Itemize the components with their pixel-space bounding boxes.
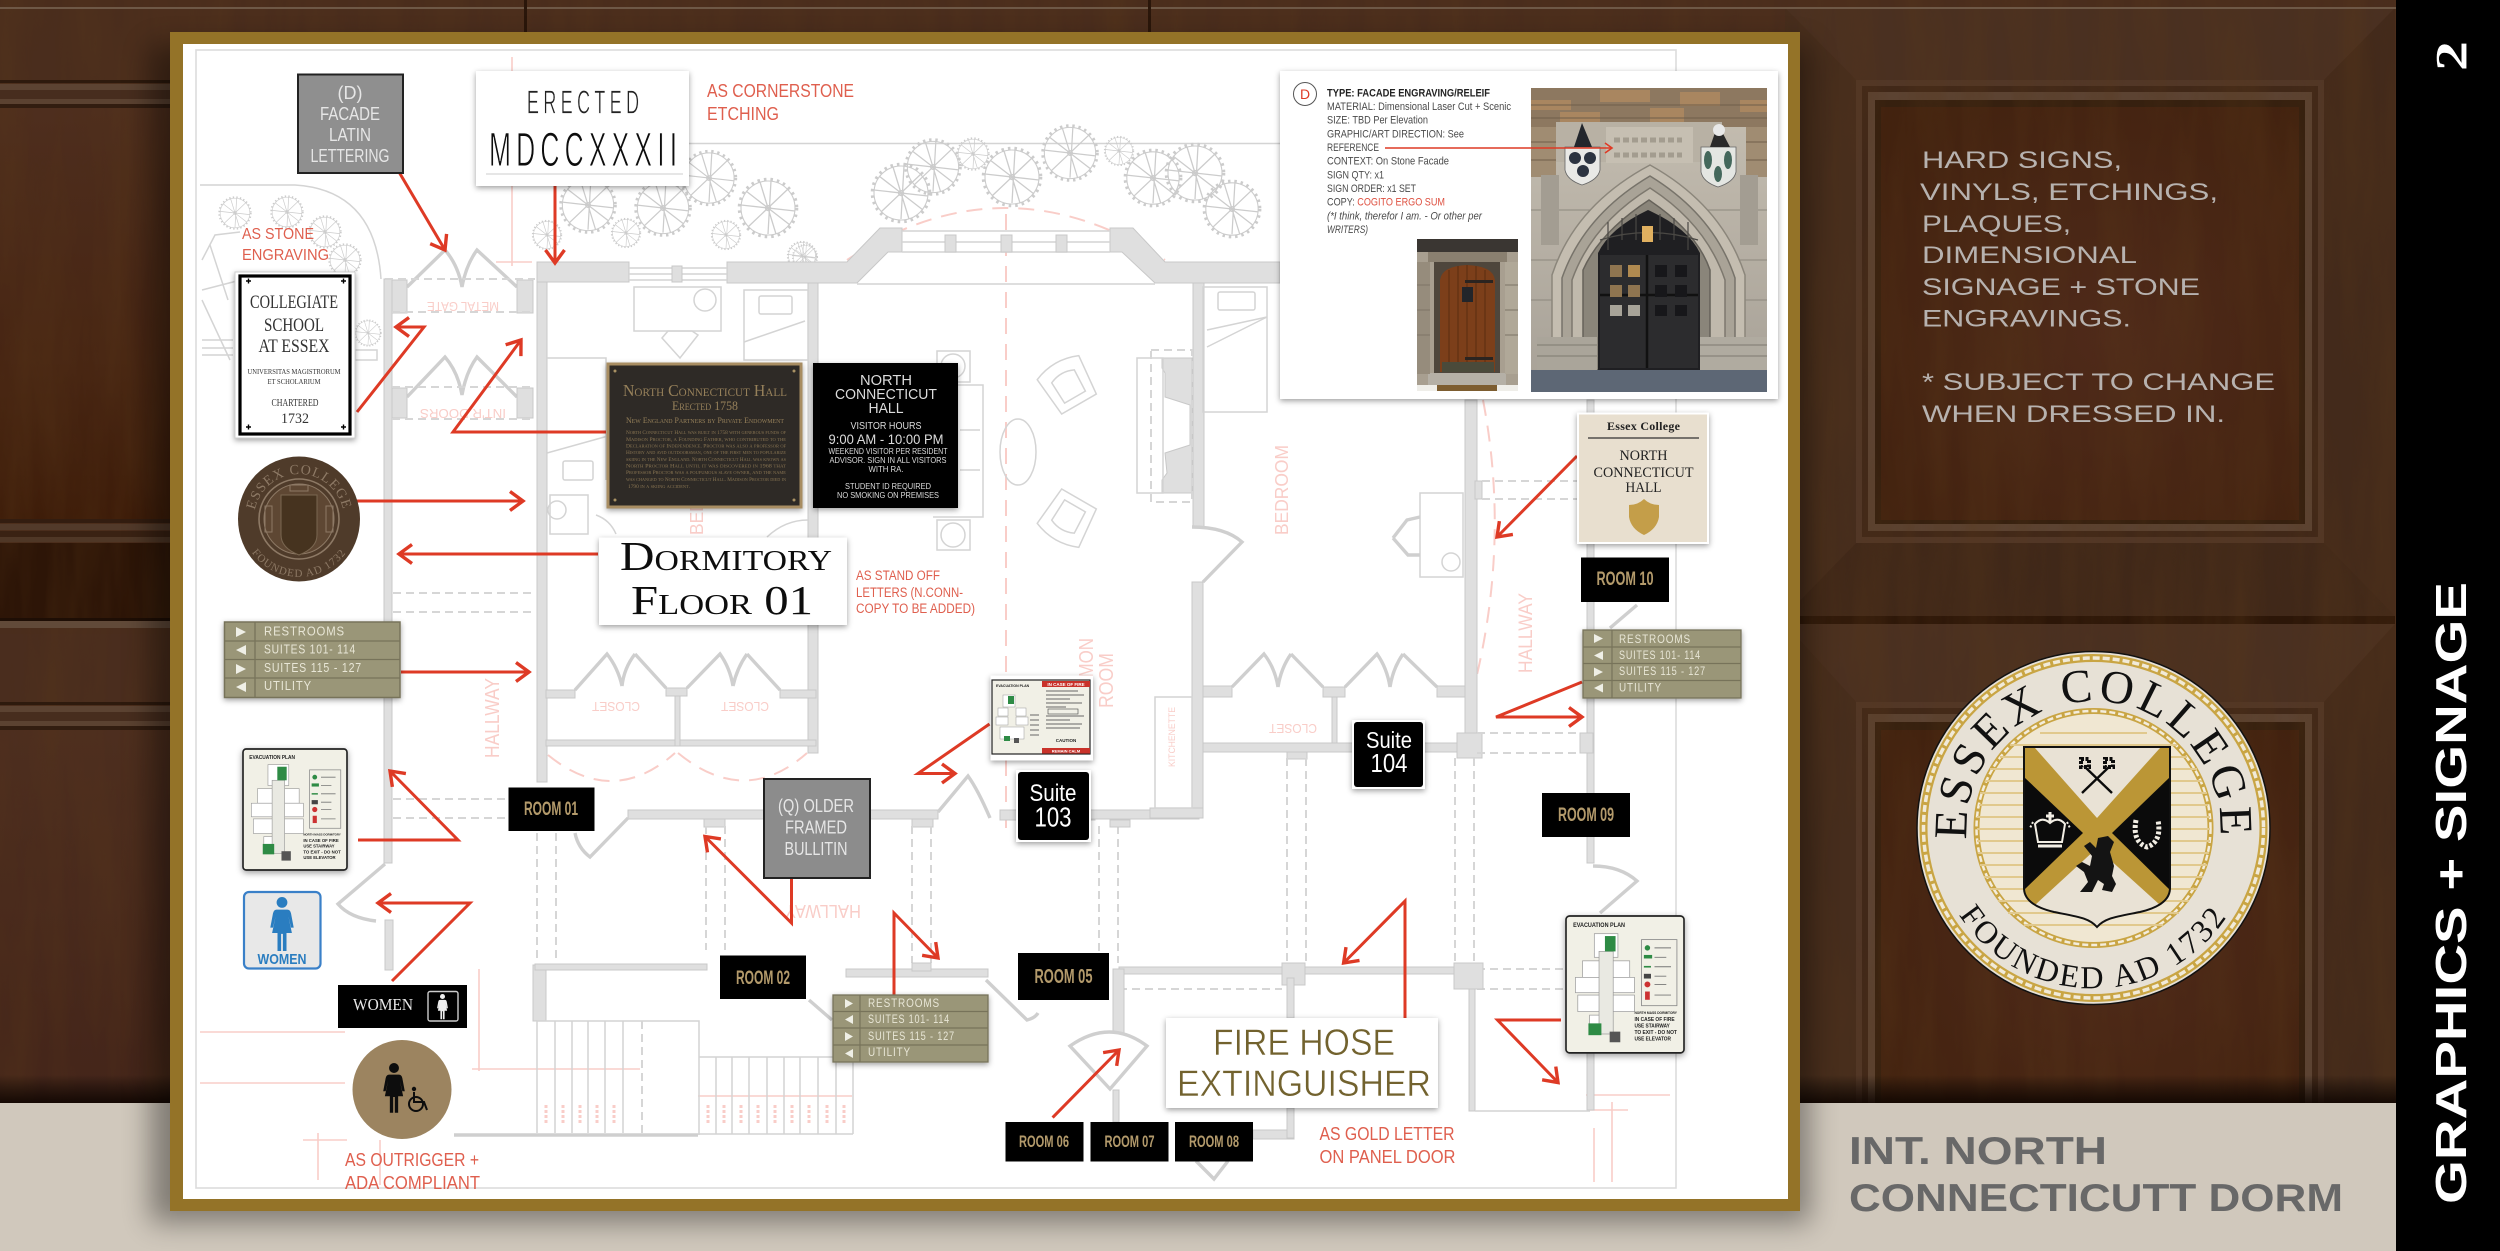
- description text block: ENGRAVINGS.: [1922, 306, 2131, 332]
- annotation: as outrigger: [345, 1150, 480, 1193]
- sign: suite 103: 103: [1034, 802, 1072, 832]
- sign: collegiate school stone engraving: AT ESSEX: [258, 336, 330, 357]
- sign: essex college building plaque: HALL: [1626, 480, 1662, 496]
- sign: directory middle: SUITES 115 - 127: [868, 1031, 955, 1043]
- sign: directory left: UTILITY: [264, 678, 312, 693]
- photo: stone gothic entry: [1531, 88, 1767, 392]
- stairs: [537, 1021, 853, 1135]
- sign: essex college building plaque: Essex College: [1607, 419, 1681, 433]
- sign: bronze history plaque: History and avid outdoorsman, one of the first men to popularize: [626, 451, 787, 456]
- sign: evacuation plan right: TO EXIT - DO NOT: [1634, 1030, 1678, 1036]
- black side strip with vertical title: [2396, 0, 2500, 1251]
- description text block: HARD SIGNS,: [1922, 147, 2122, 174]
- bathroom and left room fixtures: [634, 287, 721, 331]
- description text block: * SUBJECT TO CHANGE: [1922, 369, 2275, 396]
- trees: [219, 126, 1260, 346]
- room sign 02: [720, 956, 806, 999]
- footer title: [1849, 1130, 2343, 1220]
- annotation: as cornerstone etching: [707, 81, 854, 124]
- sign: directory right: [1583, 630, 1741, 698]
- sign: dormitory floor 01: Dormitory: [620, 533, 832, 579]
- sign: bronze history plaque: was changed to North Connecticut Hall. Madison Proctor died in: [626, 478, 786, 483]
- sign: directory right: UTILITY: [1619, 682, 1662, 694]
- floor plan drawing: [196, 50, 1676, 1188]
- sign: fire hose extinguisher: EXTINGUISHER: [1177, 1063, 1431, 1104]
- annotation: as gold letter: ON PANEL DOOR: [1320, 1147, 1456, 1167]
- sign: bronze history plaque: North Proctor Hall until it was discovered in 1968 that: [626, 464, 787, 470]
- annotation: as outrigger: AS OUTRIGGER +: [345, 1150, 479, 1170]
- sign: collegiate school stone engraving: CHARTERED: [272, 398, 318, 409]
- footer title: CONNECTICUTT DORM: [1849, 1177, 2343, 1220]
- spec text: MATERIAL: Dimensional Laser Cut + Scenic: [1327, 101, 1511, 113]
- sign: directory right: SUITES 115 - 127: [1619, 666, 1706, 678]
- plan room labels: [420, 299, 1537, 921]
- sign: essex college building plaque: CONNECTICUT: [1594, 465, 1694, 481]
- annotation: as gold letter: [1320, 1124, 1456, 1167]
- college seal: FOUNDED AD 1732: [1959, 903, 2226, 988]
- plan room labels: CLOSET: [1269, 721, 1317, 736]
- photo: wooden door: [1417, 239, 1518, 391]
- room sign 01: [508, 788, 594, 831]
- sign: evacuation plan right: USE STAIRWAY: [1634, 1024, 1670, 1030]
- pink centerline and arcs: [1005, 214, 1007, 830]
- sign: collegiate school stone engraving: 1732: [281, 411, 309, 427]
- panel: facade engraving spec card: [1280, 71, 1778, 399]
- fireplace: [1162, 358, 1192, 493]
- sign: suite 103: [1016, 770, 1091, 842]
- spec text: SIZE: TBD Per Elevation: [1327, 115, 1428, 127]
- room sign 10: ROOM 10: [1596, 569, 1654, 590]
- sign: bronze history plaque: 1790 in a skiing accident.: [628, 485, 690, 490]
- arrows: [347, 172, 1582, 1118]
- annotation: as stand off letters: AS STAND OFF: [856, 568, 940, 583]
- annotation: as stone engraving: [242, 226, 329, 264]
- sign: directory middle: [833, 995, 988, 1062]
- description text block: WHEN DRESSED IN.: [1922, 401, 2225, 428]
- callout box: facade latin lettering: LETTERING: [310, 146, 390, 166]
- sign: small evacuation plan: EVACUATION PLAN: [996, 684, 1030, 688]
- arrow: reference pointer: [1385, 147, 1612, 149]
- sign: visitor hours: 9:00 AM - 10:00 PM: [828, 431, 944, 447]
- icon: lion: [2076, 836, 2116, 892]
- sign: directory middle: SUITES 101- 114: [868, 1014, 950, 1026]
- sign: suite 104: [1352, 720, 1425, 789]
- sign: visitor hours: NORTH: [860, 372, 912, 389]
- room sign 10: [1581, 558, 1669, 602]
- plan room labels: CLOSET: [721, 699, 769, 714]
- sign: erected cornerstone: MDCCXXXII: [489, 124, 677, 177]
- sign: directory left: [224, 622, 400, 698]
- sign: women black: WOMEN: [353, 995, 413, 1014]
- callout box: facade latin lettering: (D): [338, 83, 362, 103]
- room sign 09: [1542, 793, 1630, 837]
- annotation: as stand off letters: [856, 568, 975, 616]
- vertical walls: [808, 283, 818, 753]
- sign: women blue pictogram: [244, 892, 320, 968]
- callout box: older framed bulletin: [764, 779, 870, 878]
- room sign 06: [1006, 1122, 1084, 1162]
- black side strip with vertical title: 2: [2427, 41, 2476, 71]
- left hallway door: [338, 864, 385, 921]
- sign: essex college building plaque: [1577, 412, 1709, 544]
- annotation: as outrigger: ADA COMPLIANT: [345, 1173, 480, 1193]
- sign: bronze history plaque: North Connecticut Hall: [623, 381, 787, 400]
- sign: erected cornerstone: ERECTED: [527, 84, 639, 121]
- plan room labels: METAL GATE: [427, 299, 499, 314]
- sign: women blue pictogram: WOMEN: [258, 951, 306, 968]
- sign: directory left: RESTROOMS: [264, 624, 345, 638]
- icon: D callout marker: D: [1300, 86, 1310, 102]
- annotation: as stand off letters: LETTERS (N.CONN-: [856, 585, 963, 600]
- white plan sheet: [183, 44, 1788, 1199]
- sign: evacuation plan left: USE ELEVATOR: [303, 855, 336, 861]
- description text block: SIGNAGE + STONE: [1922, 274, 2200, 301]
- sign: visitor hours: WEEKEND VISITOR PER RESIDENT: [828, 447, 948, 456]
- description text block: VINYLS, ETCHINGS,: [1920, 179, 2218, 206]
- annotation: as cornerstone etching: ETCHING: [707, 104, 779, 124]
- description text block: [1920, 147, 2275, 428]
- frame shadow: [150, 45, 1810, 1223]
- sign: visitor hours: HALL: [868, 400, 904, 417]
- annotation: as stone engraving: AS STONE: [242, 226, 314, 243]
- room sign 09: ROOM 09: [1558, 805, 1614, 826]
- sign: erected cornerstone: [476, 71, 689, 186]
- sign: bronze college medallion: ESSEX COLLEGE: [246, 464, 352, 510]
- sign: collegiate school stone engraving: SCHOOL: [264, 315, 324, 336]
- room sign 02: ROOM 02: [736, 968, 790, 989]
- sign: collegiate school stone engraving: ET SCHOLARIUM: [268, 378, 321, 386]
- central corridor walls: [628, 810, 765, 819]
- right closets and partitions: [1232, 654, 1437, 687]
- sign: suite 104: Suite: [1366, 727, 1412, 753]
- sign: evacuation plan right: EVACUATION PLAN: [1573, 922, 1625, 929]
- sign: directory middle: UTILITY: [868, 1047, 911, 1059]
- gold picture frame: [170, 32, 1800, 1211]
- sign: collegiate school stone engraving: UNIVERSITAS MAGISTRORUM: [248, 368, 341, 376]
- spec text: (*I think, therefor I am. - Or other per: [1327, 210, 1483, 222]
- college seal: ESSEX COLLEGE: [1935, 670, 2252, 838]
- sign: bronze history plaque: New England Partners by Private Endowment: [626, 416, 784, 425]
- sign: evacuation plan right: IN CASE OF FIRE: [1634, 1017, 1675, 1023]
- plan room labels: CLOSET: [592, 699, 640, 714]
- room sign 07: [1090, 1122, 1168, 1162]
- spec text: SIGN ORDER: x1 SET: [1327, 183, 1416, 195]
- room sign 01: ROOM 01: [524, 799, 578, 820]
- sign: women black: [338, 985, 467, 1028]
- sign: essex college building plaque: NORTH: [1620, 448, 1668, 464]
- sign: evacuation plan right: USE ELEVATOR: [1634, 1036, 1671, 1042]
- annotation: as stand off letters: COPY TO BE ADDED): [856, 601, 975, 616]
- callout box: older framed bulletin: (Q) OLDER: [778, 796, 854, 816]
- beige footer band: [0, 1103, 2396, 1251]
- sign: suite 103: Suite: [1030, 780, 1076, 807]
- sign: dormitory floor 01: Floor 01: [631, 577, 813, 623]
- sign: collegiate school stone engraving: [235, 272, 355, 438]
- sign: visitor hours: CONNECTICUT: [835, 386, 937, 403]
- left closets: [575, 654, 780, 690]
- sign: directory left: SUITES 101- 114: [264, 642, 356, 656]
- description text block: PLAQUES,: [1922, 211, 2071, 238]
- sign: small evacuation plan: IN CASE OF FIRE: [1047, 682, 1085, 687]
- sign: visitor hours: VISITOR HOURS: [850, 421, 922, 432]
- callout box: facade latin lettering: LATIN: [329, 125, 371, 145]
- plan room labels: HALLWAY: [785, 901, 861, 921]
- spec text: SIGN QTY: x1: [1327, 169, 1384, 181]
- sign: evacuation plan left: TO EXIT - DO NOT: [303, 849, 341, 855]
- spec text: WRITERS): [1327, 224, 1368, 236]
- footer title: INT. NORTH: [1849, 1130, 2107, 1173]
- room sign 06: ROOM 06: [1019, 1132, 1069, 1151]
- callout box: older framed bulletin: BULLITIN: [784, 839, 848, 859]
- icon: laurel: [2135, 820, 2159, 847]
- sign: small evacuation plan: CAUTION: [1056, 738, 1076, 743]
- room sign 08: ROOM 08: [1189, 1132, 1239, 1151]
- icon: crown: [2030, 812, 2070, 846]
- sign: ADA outrigger: [352, 1040, 452, 1139]
- plan room labels: ROOM: [1096, 653, 1118, 708]
- sign: fire hose extinguisher: FIRE HOSE: [1213, 1022, 1395, 1063]
- plan room labels: COMMON: [1076, 638, 1098, 717]
- sign: visitor hours: ADVISOR. SIGN IN ALL VISITORS: [830, 456, 946, 465]
- sign: visitor hours: WITH RA.: [868, 465, 904, 474]
- spec text: GRAPHIC/ART DIRECTION: See: [1327, 128, 1464, 140]
- sign: fire hose extinguisher: [1166, 1018, 1438, 1108]
- sign: small evacuation plan: [990, 676, 1093, 760]
- sign: directory middle: RESTROOMS: [868, 998, 940, 1010]
- room sign 07: ROOM 07: [1104, 1132, 1154, 1151]
- callout box: older framed bulletin: FRAMED: [785, 818, 847, 838]
- sign: dormitory floor 01: [599, 533, 847, 625]
- spec text: COPY: COGITO ERGO SUM: [1327, 197, 1445, 209]
- sign: evacuation plan right: NORTH MASS DORMITORY: [1634, 1011, 1678, 1015]
- callout box: facade latin lettering: [298, 74, 403, 173]
- sign: bronze history plaque: Declaration of Independence. Proctor was also a professor of: [626, 444, 787, 450]
- plan room labels: HALLWAY: [482, 678, 504, 758]
- sign: suite 104: 104: [1370, 748, 1408, 778]
- sign: directory left: SUITES 115 - 127: [264, 660, 362, 675]
- sign: bronze history plaque: Professor Proctor was a poufumous slave owner, and the name: [626, 471, 787, 476]
- sign: bronze college medallion: [238, 456, 360, 582]
- spec text: [1327, 87, 1511, 236]
- black side strip with vertical title: GRAPHICS + SIGNAGE: [2427, 582, 2476, 1204]
- sign: evacuation plan right: [1566, 916, 1684, 1053]
- sign: evacuation plan left: USE STAIRWAY: [303, 844, 335, 850]
- furniture: [1000, 419, 1036, 485]
- sign: small evacuation plan: REMAIN CALM: [1052, 748, 1081, 754]
- sign: bronze history plaque: North Connecticut Hall was built in 1758 with generous funds of: [626, 431, 787, 436]
- plan room labels: BEDROOM: [1272, 445, 1292, 535]
- plan room labels: INT'R DOORS: [420, 406, 506, 421]
- annotation: as stone engraving: ENGRAVING: [242, 247, 329, 264]
- description text block: DIMENSIONAL: [1922, 242, 2137, 269]
- annotation: as cornerstone etching: AS CORNERSTONE: [707, 81, 854, 101]
- sign: bronze college medallion: FOUNDED AD 1732: [252, 548, 346, 577]
- sign: directory right: SUITES 101- 114: [1619, 650, 1701, 662]
- exterior walls: [537, 262, 629, 282]
- sign: evacuation plan left: NORTH MASS DORMITORY: [303, 833, 342, 837]
- room sign 08: [1175, 1122, 1253, 1162]
- spec text: CONTEXT: On Stone Facade: [1327, 156, 1449, 168]
- plan room labels: BEDROOM: [687, 445, 707, 535]
- sign: bronze history plaque: Erected 1758: [672, 398, 738, 413]
- spec text: REFERENCE: [1327, 142, 1379, 154]
- spec text: TYPE: FACADE ENGRAVING/RELEIF: [1327, 87, 1490, 99]
- entry gate doors: [407, 250, 517, 397]
- plan room labels: HALLWAY: [1516, 593, 1537, 673]
- sign: bronze history plaque: skiing in the New England. North Connecticut Hall was known as: [626, 458, 786, 463]
- sign: bronze history plaque: Madison Proctor, a Founding Father, who contributed to the: [626, 438, 787, 443]
- sign: evacuation plan left: [243, 749, 347, 870]
- icon: D callout marker: [1294, 82, 1316, 106]
- sign: visitor hours: [813, 363, 958, 508]
- sign: directory right: RESTROOMS: [1619, 634, 1691, 646]
- sign: visitor hours: STUDENT ID REQUIRED: [845, 482, 931, 491]
- sign: evacuation plan left: EVACUATION PLAN: [249, 755, 295, 761]
- sign: bronze history plaque: [608, 364, 801, 507]
- sign: evacuation plan left: IN CASE OF FIRE: [303, 838, 339, 844]
- callout box: facade latin lettering: FACADE: [320, 104, 380, 124]
- annotation: as gold letter: AS GOLD LETTER: [1320, 1124, 1454, 1144]
- sign: collegiate school stone engraving: COLLEGIATE: [250, 292, 338, 313]
- room sign 05: [1018, 953, 1109, 1000]
- lower corridor walls: [1119, 967, 1472, 974]
- sign: visitor hours: NO SMOKING ON PREMISES: [837, 491, 939, 500]
- icon: crossed keys: [2081, 759, 2113, 793]
- room sign 05: ROOM 05: [1034, 966, 1092, 988]
- plan room labels: KITCHENETTE: [1167, 707, 1177, 767]
- college seal: [1916, 650, 2271, 1006]
